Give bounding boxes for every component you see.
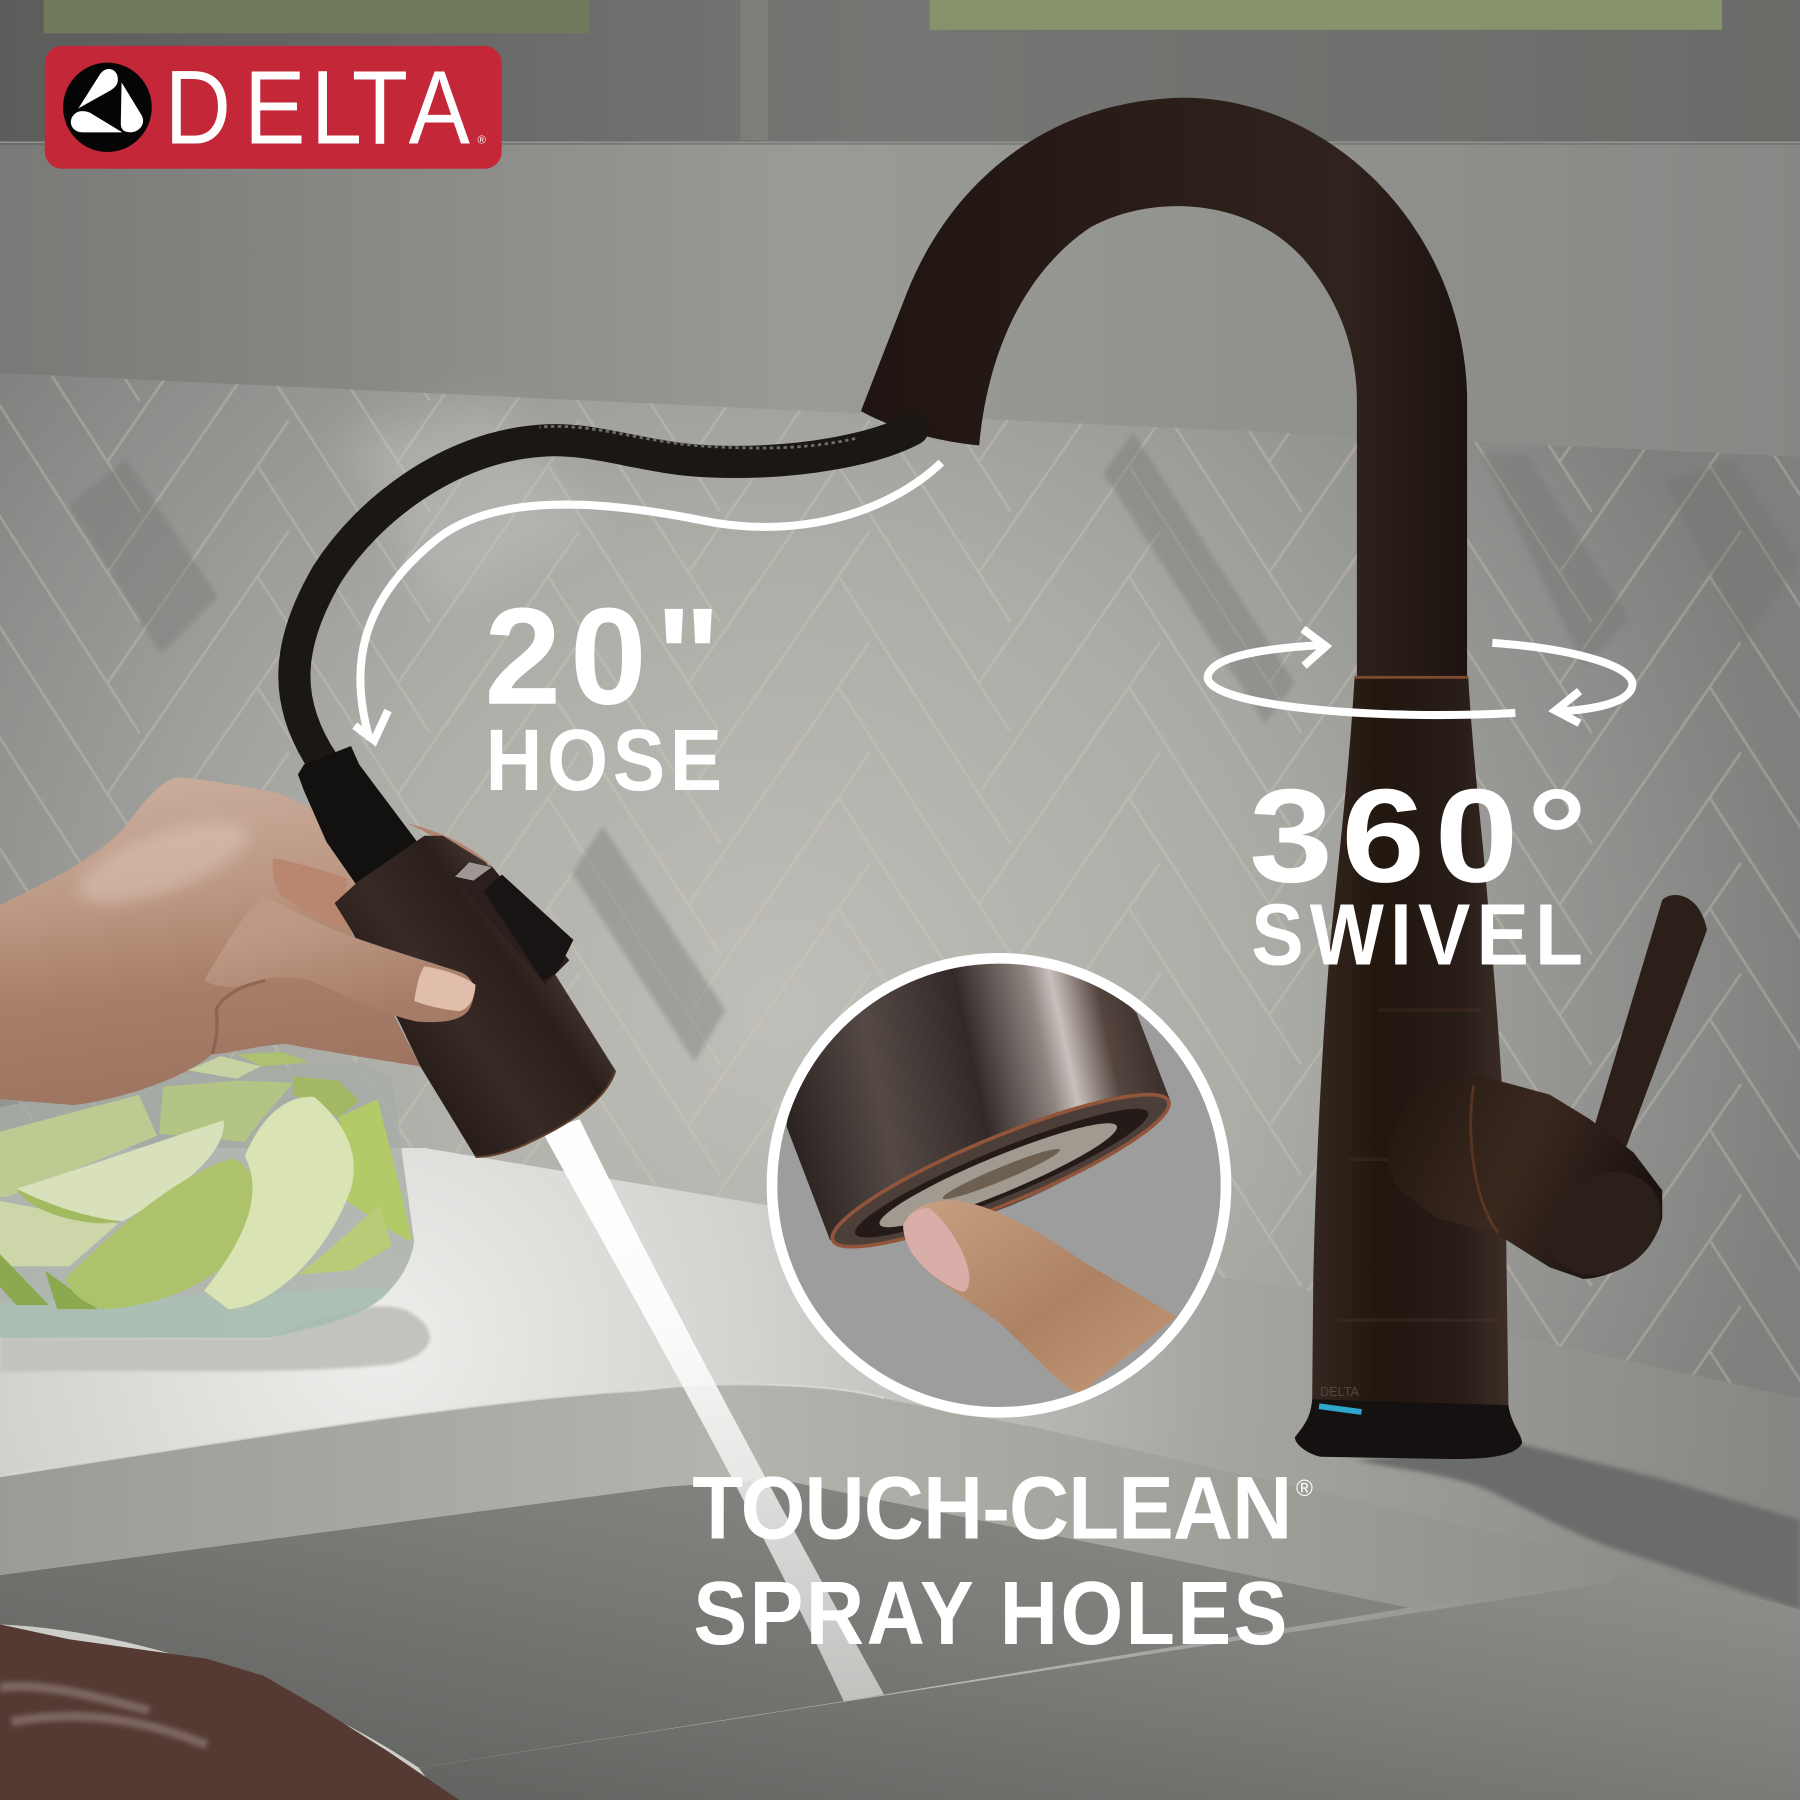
label: 360 degree swivel: SWIVEL bbox=[1251, 885, 1583, 983]
thumb nail bbox=[414, 966, 475, 1011]
palm crease bbox=[212, 981, 265, 1054]
arrows: 360 degree swivel bbox=[1208, 629, 1632, 723]
glass bowl bbox=[0, 1062, 414, 1338]
faucet gooseneck spout bbox=[861, 98, 1467, 680]
fingertip bbox=[903, 1200, 1177, 1393]
logo: Delta bbox=[45, 46, 502, 169]
bowl shadow on counter bbox=[0, 1306, 430, 1372]
arrow: hose reach bbox=[355, 463, 941, 740]
handle seam bbox=[1471, 1085, 1498, 1233]
lower left hand bbox=[0, 1624, 459, 1800]
sprayer head bbox=[335, 836, 615, 1157]
label: touch-clean spray holes: SPRAY HOLES bbox=[693, 1564, 1287, 1664]
spray head body bbox=[787, 957, 1170, 1241]
spray face with nozzles bbox=[830, 1092, 1171, 1248]
label: touch-clean spray holes: ® bbox=[1296, 1475, 1313, 1501]
faucet body bbox=[1312, 677, 1508, 1405]
label: touch-clean spray holes bbox=[692, 1459, 1313, 1664]
logo wordmark: DELTA bbox=[165, 49, 470, 166]
background: countertop and sink bbox=[0, 1148, 1800, 1800]
front counter edge bbox=[419, 1567, 1800, 1800]
faucet base bbox=[1295, 1399, 1522, 1459]
label: 360 degree swivel: 360° bbox=[1249, 762, 1587, 911]
callout circle ring bbox=[772, 958, 1226, 1412]
registered mark: ® bbox=[478, 134, 487, 146]
label: 360 degree swivel bbox=[1249, 762, 1587, 983]
blue indicator light bbox=[1319, 1406, 1361, 1412]
sprayer rim bbox=[475, 1070, 615, 1157]
back of hand highlight bbox=[69, 805, 257, 920]
handle end cap bbox=[1528, 1151, 1680, 1296]
sink rim wall bbox=[0, 1384, 1622, 1608]
sprayer button bbox=[484, 875, 573, 981]
handle hub bbox=[1388, 1076, 1662, 1279]
label: 20 inch hose: 20" bbox=[484, 580, 721, 734]
middle finger shadow bbox=[273, 858, 347, 928]
sink basin bbox=[0, 1479, 1412, 1768]
hand, fingers and sprayer bbox=[0, 746, 615, 1157]
faucet bbox=[861, 98, 1707, 1459]
label: touch-clean spray holes: TOUCH-CLEAN bbox=[692, 1459, 1292, 1558]
faucet body mark: DELTA bbox=[1320, 1385, 1360, 1399]
callout circle background bbox=[772, 958, 1226, 1412]
water stream bbox=[542, 1119, 884, 1701]
fingernail bbox=[903, 1208, 969, 1292]
bowl of green apple slices bbox=[0, 1052, 430, 1372]
sprayer collar bbox=[453, 862, 569, 985]
apple slices bbox=[237, 1052, 310, 1066]
handle lever bbox=[1590, 895, 1707, 1158]
hand behind sprayer bbox=[0, 777, 420, 1105]
logo red badge bbox=[45, 46, 502, 169]
braided hose bbox=[294, 426, 913, 763]
callout: touch-clean spray face close-up bbox=[772, 957, 1226, 1412]
sprayer connector bbox=[298, 746, 420, 889]
fingertip behind sprayer bbox=[408, 824, 496, 870]
label: 20 inch hose bbox=[484, 580, 722, 809]
logo emblem bbox=[63, 63, 152, 152]
label: 20 inch hose: HOSE bbox=[486, 711, 722, 809]
thumb bbox=[204, 895, 474, 1022]
background: marble herringbone backsplash bbox=[0, 373, 1800, 1406]
